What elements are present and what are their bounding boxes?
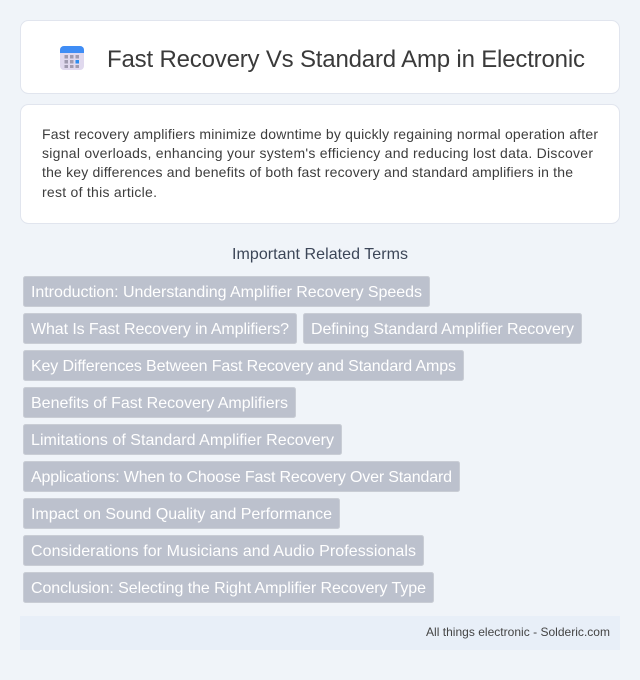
panel: intro paragraph: Fast recovery amplifiers minimize downtime by quickly regaining normal operation after — [42, 126, 598, 142]
tag — [24, 498, 340, 528]
tag: Key Differences Between Fast Recovery and Standard Amps — [31, 358, 456, 375]
tag: Defining Standard Amplifier Recovery — [311, 321, 574, 338]
tag — [24, 536, 424, 566]
tag — [24, 572, 434, 602]
tag: Introduction: Understanding Amplifier Recovery Speeds — [31, 284, 422, 301]
tag — [24, 276, 430, 306]
tag — [24, 314, 296, 344]
tag — [24, 424, 342, 454]
tag — [24, 462, 460, 492]
tag — [24, 388, 296, 418]
tag list — [24, 276, 582, 602]
footer: All things electronic - Solderic.com — [426, 625, 610, 639]
tag: Benefits of Fast Recovery Amplifiers — [31, 395, 288, 412]
footer — [20, 616, 620, 650]
tag: Impact on Sound Quality and Performance — [31, 506, 332, 523]
tag: Considerations for Musicians and Audio Professionals — [31, 543, 416, 560]
heading: related terms: Important Related Terms — [232, 246, 408, 263]
panel: intro paragraph: signal overloads, enhancing your system's efficiency and reducing lost data. Discover — [42, 145, 593, 161]
icon: calendar — [60, 46, 84, 70]
tag: What Is Fast Recovery in Amplifiers? — [31, 321, 289, 338]
header panel — [20, 20, 620, 94]
tag: Applications: When to Choose Fast Recovery Over Standard — [31, 469, 452, 486]
tag: Conclusion: Selecting the Right Amplifier Recovery Type — [31, 580, 426, 597]
tag: Limitations of Standard Amplifier Recovery — [31, 432, 334, 449]
tag — [304, 314, 582, 344]
panel: intro paragraph — [20, 104, 620, 224]
tag — [24, 350, 464, 380]
title: Fast Recovery Vs Standard Amp in Electronic — [107, 46, 585, 73]
panel: intro paragraph: rest of this article. — [42, 184, 157, 200]
panel: intro paragraph: the key differences and benefits of both fast recovery and standard amplifiers in the — [42, 164, 573, 180]
